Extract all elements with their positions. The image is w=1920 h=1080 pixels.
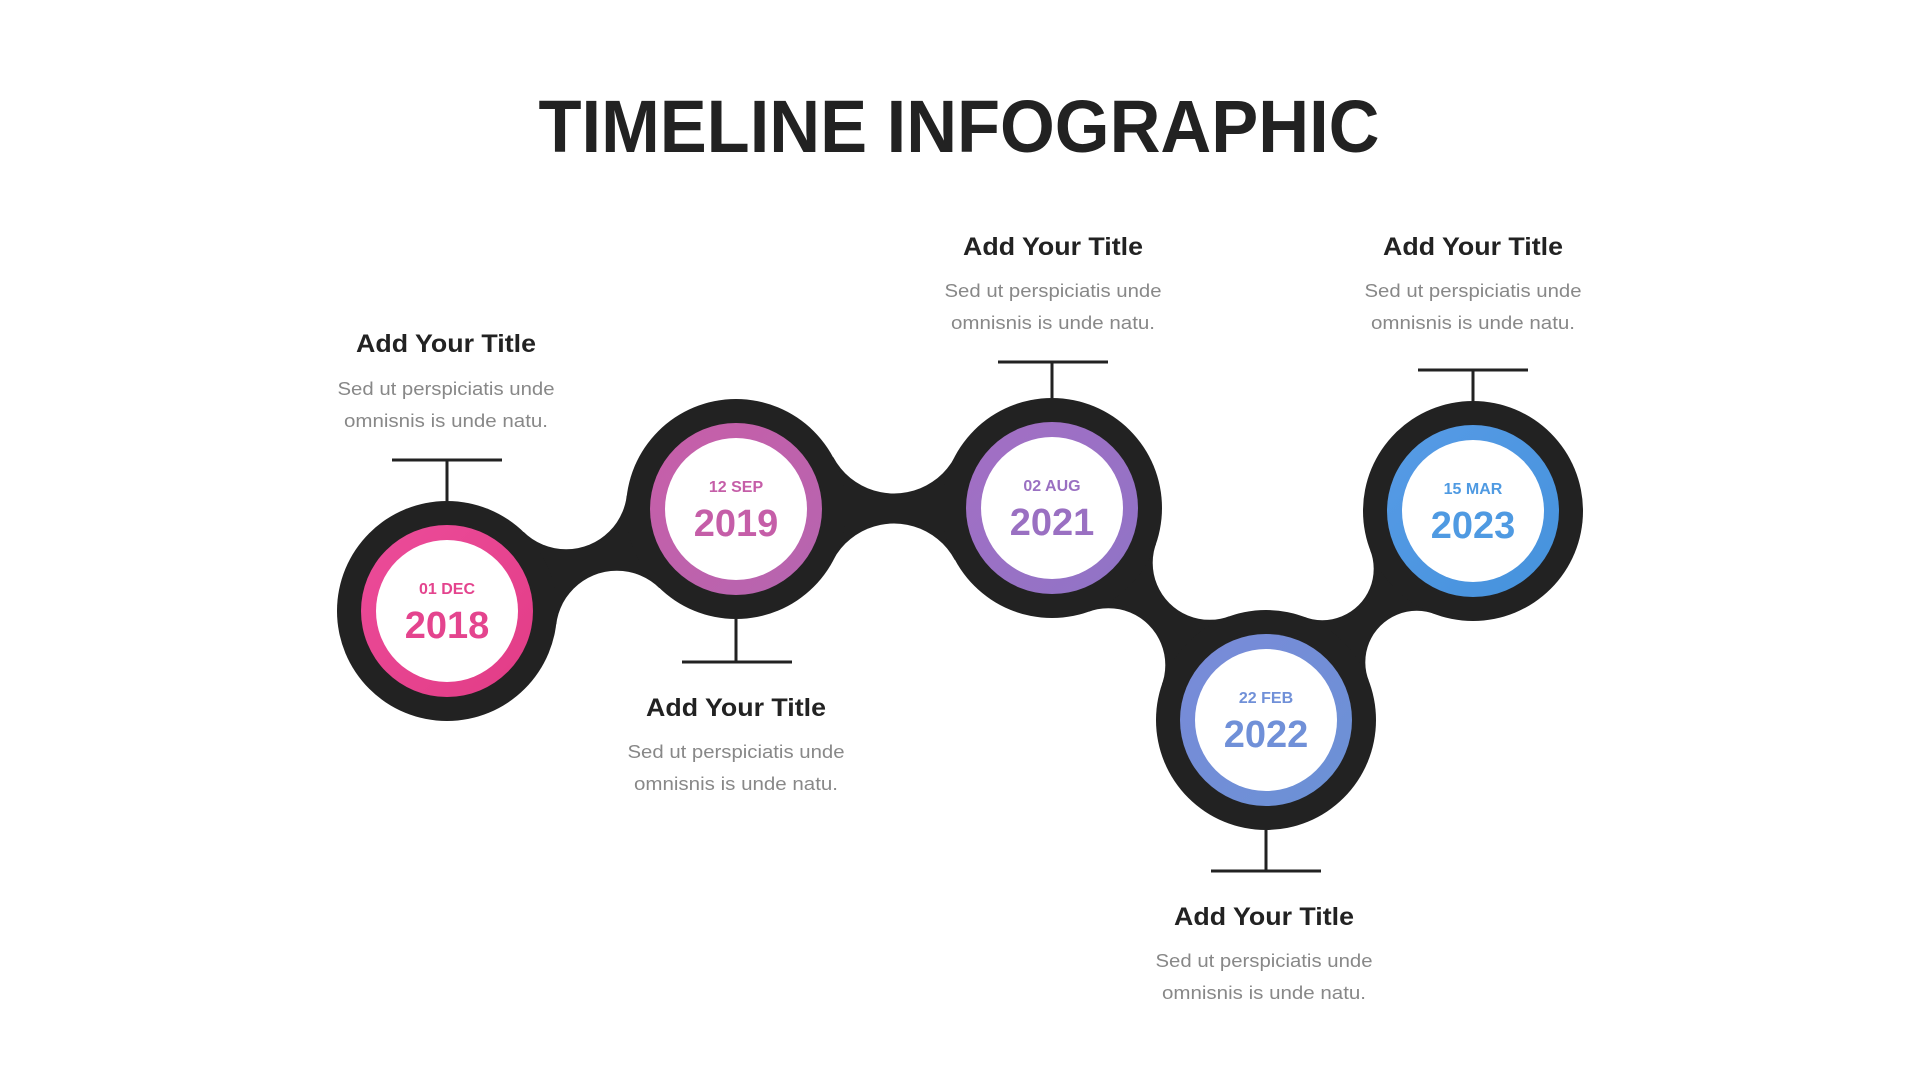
milestone 2018: Sed ut perspiciatis unde [338,379,554,399]
milestone 2019: 2019 [694,503,778,545]
milestone 2023: omnisnis is unde natu. [1371,313,1575,333]
milestone 2021: Add Your Title [963,233,1143,261]
milestone 2018: omnisnis is unde natu. [344,411,548,431]
milestone 2022 [1156,634,1372,1003]
milestone 2022: 2022 [1224,714,1308,756]
milestone 2018: Add Your Title [356,330,536,358]
milestone 2022: Add Your Title [1174,903,1354,931]
milestone 2023: Add Your Title [1383,233,1563,261]
milestone 2021: 02 AUG [1023,478,1081,495]
milestone 2021 [944,233,1162,594]
title: TIMELINE INFOGRAPHIC [538,85,1380,168]
milestone 2018 [338,330,554,697]
milestone 2019 [628,423,844,794]
milestone 2023: Sed ut perspiciatis unde [1364,281,1582,301]
milestone 2021: 2021 [1010,502,1094,544]
milestone 2019: Sed ut perspiciatis unde [628,742,844,762]
timeline track [337,356,1583,830]
milestone 2021: Sed ut perspiciatis unde [944,281,1162,301]
milestone 2023 [1364,233,1582,597]
milestone 2019: Add Your Title [646,694,826,722]
milestone 2018: 2018 [405,605,489,647]
milestone 2018: 01 DEC [419,581,475,598]
milestone 2023: 2023 [1431,505,1515,547]
milestone 2022: Sed ut perspiciatis unde [1156,951,1372,971]
milestone 2023: 15 MAR [1444,481,1503,498]
milestone 2019: 12 SEP [709,479,763,496]
milestone 2022: 22 FEB [1239,690,1293,707]
milestone 2021: omnisnis is unde natu. [951,313,1155,333]
milestone 2022: omnisnis is unde natu. [1162,983,1366,1003]
milestone 2019: omnisnis is unde natu. [634,774,838,794]
